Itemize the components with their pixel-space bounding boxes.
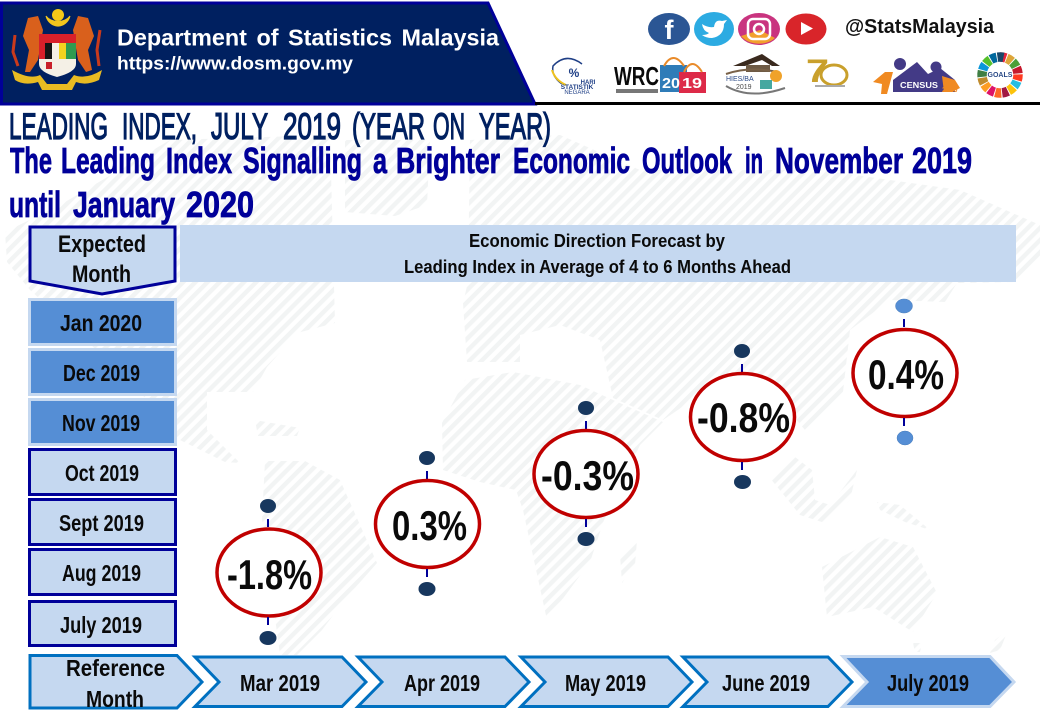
header banner — [2, 3, 535, 104]
value: June 2019 -0.8%: -0.8% — [697, 394, 790, 441]
reference: July 2019: July 2019 — [887, 670, 969, 696]
expected: Jan 2020: Jan 2020 — [60, 310, 142, 336]
logo: Hari Statistik Negara: NEGARA — [564, 90, 590, 96]
subtitle: in — [745, 140, 763, 181]
background: hatched world map — [5, 135, 1040, 655]
expected: Dec 2019: Dec 2019 — [63, 360, 140, 386]
title: 2019 — [283, 106, 341, 147]
subtitle: until — [9, 184, 61, 225]
subtitle: 2019 — [912, 140, 972, 181]
title: JULY — [211, 106, 268, 147]
value: Apr 2019 0.3%: 0.3% — [392, 502, 467, 549]
icon: twitter — [694, 12, 734, 46]
panel: expected month heading: Month — [72, 261, 131, 288]
value: June 2019 -0.8% — [690, 344, 794, 489]
value: May 2019 -0.3%: -0.3% — [541, 452, 634, 499]
expected: Dec 2019 — [30, 350, 176, 394]
reference month timeline — [30, 655, 1014, 712]
subtitle: Signalling — [243, 140, 362, 181]
logo: 70 years: 7 — [806, 53, 829, 89]
logo: WRC 2019: 20 — [662, 75, 680, 92]
title: INDEX, — [122, 106, 197, 147]
subtitle: a — [373, 140, 388, 181]
logo: Hari Statistik Negara: % — [569, 66, 580, 80]
chart: leading index values — [217, 299, 957, 645]
subtitle: Outlook — [642, 140, 733, 181]
expected: Nov 2019 — [30, 400, 176, 444]
icon: facebook — [648, 13, 690, 45]
value: July 2019 0.4% — [853, 299, 957, 445]
panel: expected month heading — [30, 227, 175, 294]
reference: June 2019: June 2019 — [722, 670, 810, 696]
subtitle: Brighter — [396, 140, 500, 181]
header rule — [535, 102, 1040, 105]
reference: May 2019 — [521, 657, 692, 706]
reference: May 2019: May 2019 — [565, 670, 646, 696]
social icons — [648, 12, 826, 46]
expected: Sept 2019: Sept 2019 — [59, 510, 144, 536]
logo: sustainable development goals wheel — [975, 50, 1025, 100]
subtitle: 2020 — [186, 184, 254, 225]
logo: sustainable development goals wheel: GOALS — [988, 72, 1013, 79]
logo: Census 2020: CENSUS — [900, 80, 938, 90]
subtitle: The — [10, 140, 52, 181]
logo: Hari Statistik Negara: HARI — [581, 80, 596, 86]
value: July 2019 0.4%: 0.4% — [868, 351, 944, 398]
logo: WRC 2019: 19 — [682, 75, 702, 92]
subtitle: Leading — [61, 140, 155, 181]
expected: Nov 2019: Nov 2019 — [62, 410, 140, 436]
subtitle — [9, 140, 972, 225]
social handle: @StatsMalaysia — [845, 15, 995, 38]
logo: WRC 2019 — [614, 58, 706, 93]
value: May 2019 -0.3% — [534, 401, 638, 546]
expected: Oct 2019: Oct 2019 — [65, 460, 139, 486]
subtitle: Index — [166, 140, 232, 181]
icon: facebook: f — [664, 15, 674, 45]
expected: July 2019: July 2019 — [60, 612, 142, 638]
value: Mar 2019 -1.8% — [217, 499, 321, 645]
logo: 70 years — [806, 53, 847, 89]
reference month heading — [30, 655, 202, 712]
logo: HIES/BA 2019 — [726, 54, 785, 94]
expected: Aug 2019: Aug 2019 — [62, 560, 141, 586]
reference: Mar 2019: Mar 2019 — [240, 670, 320, 696]
panel: expected month heading: Expected — [58, 231, 146, 258]
value: Mar 2019 -1.8%: -1.8% — [227, 551, 312, 598]
icon: youtube — [786, 14, 826, 44]
expected: Jan 2020 — [30, 300, 176, 344]
reference: June 2019 — [683, 657, 852, 706]
logo: HIES/BA 2019: 2019 — [736, 84, 752, 91]
logo: Hari Statistik Negara — [552, 58, 596, 96]
subtitle: November — [775, 140, 903, 181]
logo: Census 2020: 2020 — [942, 87, 958, 94]
title: LEADING — [9, 106, 108, 147]
reference month heading: Reference — [66, 655, 165, 681]
expected month list — [30, 300, 176, 646]
reference: July 2019 — [843, 656, 1014, 706]
reference: Apr 2019 — [358, 657, 529, 706]
title: YEAR) — [479, 106, 551, 147]
expected: Sept 2019 — [30, 500, 176, 544]
subtitle: Economic — [513, 140, 630, 181]
reference: Apr 2019: Apr 2019 — [404, 670, 480, 696]
logo: WRC 2019: WRC — [614, 61, 659, 91]
panel: forecast heading — [180, 225, 1016, 282]
title: (YEAR — [352, 106, 425, 147]
panel: forecast heading: Leading Index in Average of 4 to 6 Months Ahead — [404, 256, 791, 277]
reference: Mar 2019 — [195, 657, 366, 706]
expected: Oct 2019 — [30, 450, 176, 494]
logo: HIES/BA 2019: HIES/BA — [726, 76, 754, 83]
title: ON — [433, 106, 465, 147]
logo: Hari Statistik Negara: STATISTIK — [561, 84, 594, 91]
icon: instagram — [738, 13, 780, 45]
value: Apr 2019 0.3% — [376, 451, 480, 596]
expected: Aug 2019 — [30, 550, 176, 594]
expected: July 2019 — [30, 602, 176, 646]
logo: Census 2020 — [873, 58, 960, 94]
title — [9, 106, 551, 147]
panel: forecast heading: Economic Direction Forecast by — [469, 230, 726, 251]
reference month heading: Month — [86, 686, 144, 712]
crest emblem — [12, 9, 102, 90]
department name: Department of Statistics Malaysia — [117, 24, 500, 50]
website url: https://www.dosm.gov.my — [117, 52, 354, 74]
subtitle: January — [73, 184, 175, 225]
